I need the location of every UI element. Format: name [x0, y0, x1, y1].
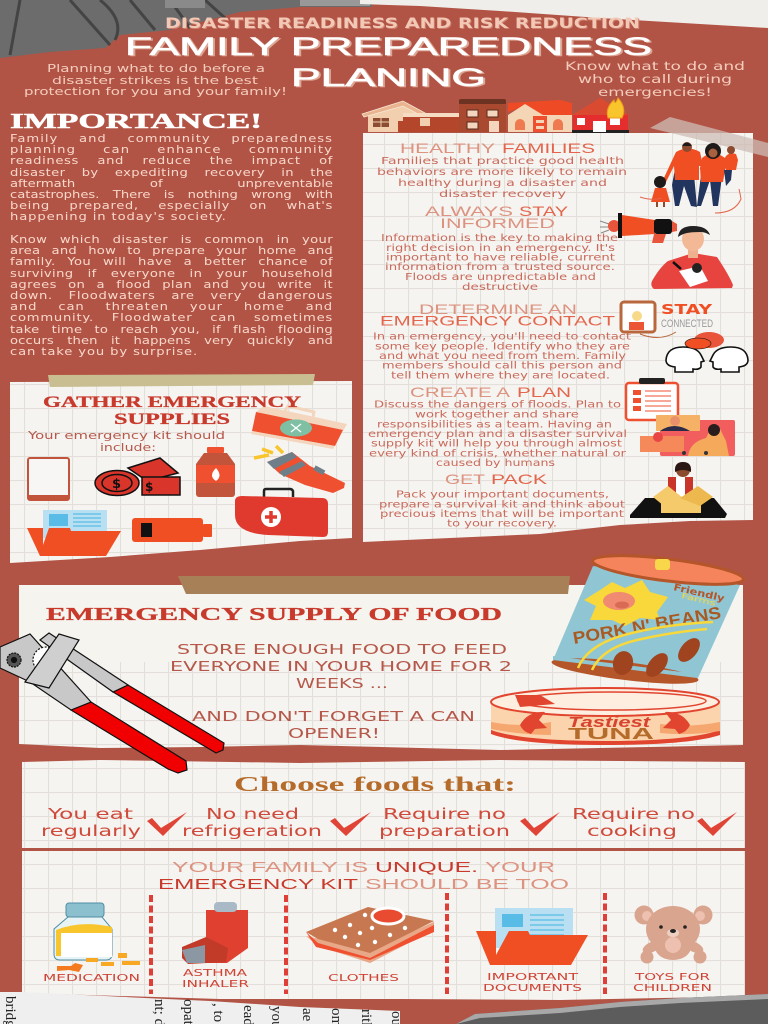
icon: money [95, 458, 180, 496]
tape on food panel [178, 576, 570, 594]
item: medication: MEDICATION [43, 973, 140, 984]
importance paragraph one: planning can enhance community [10, 144, 333, 156]
item: no need refrigeration: refrigeration [182, 822, 322, 840]
section: create a plan: work together and share [415, 410, 579, 420]
icon: pork and beans can [550, 550, 745, 689]
importance paragraph two: family. You will have a better chance of [10, 256, 333, 268]
icon: money: $ [145, 480, 153, 494]
icon: money: $ [112, 477, 121, 492]
main title: FAMILY PREPAREDNESS [125, 33, 652, 61]
main title: PLANING [291, 64, 486, 92]
icon: red medical case [235, 489, 328, 537]
section: healthy families: behaviors are more likely to remain [377, 167, 627, 178]
icon: megaphone [600, 213, 677, 243]
item: clothes: CLOTHES [328, 973, 399, 984]
importance paragraph two: can take you by surprise. [10, 346, 198, 358]
item: require no cooking [572, 805, 737, 840]
section: always stay informed [381, 203, 618, 293]
importance paragraph two: surviving if everyone in your household [10, 268, 333, 280]
item: toys for children [633, 906, 712, 994]
supplies heading: SUPPLIES [114, 411, 230, 428]
torn grey photo, bottom right [456, 994, 768, 1024]
intro text left: disaster strikes is the best [52, 75, 258, 87]
supplies heading [43, 394, 302, 428]
section: create a plan: responsibilities as a team. Having an [377, 420, 612, 430]
section: always stay informed: Information is the key to making the [381, 233, 618, 244]
icon: pork and beans can: Farms [681, 591, 717, 608]
food instructions: OPENER! [288, 727, 380, 742]
item: important documents [476, 908, 588, 994]
section: always stay informed: important to have reliable, current [386, 252, 615, 264]
section: emergency contact: EMERGENCY CONTACT [380, 312, 616, 328]
icon: stay connected phone: STAY [661, 303, 713, 318]
section: create a plan: CREATE A [410, 384, 511, 400]
section: emergency contact: tell them where they are located. [391, 370, 610, 382]
intro text right: emergencies! [598, 85, 712, 99]
section: get pack: prepare a survival kit and think about [379, 500, 625, 510]
torn grey photo, top left [0, 0, 372, 58]
section: create a plan: emergency plan and a disaster survival [368, 429, 627, 440]
supplies heading: GATHER EMERGENCY [43, 394, 302, 411]
supplies intro text: Your emergency kit should [27, 429, 225, 442]
section: get pack: GET [445, 471, 486, 487]
section: healthy families [377, 140, 627, 200]
food heading: EMERGENCY SUPPLY OF FOOD [46, 604, 502, 624]
kit heading: YOUR [485, 859, 555, 876]
icon: can opener [0, 633, 224, 773]
item: clothes [306, 907, 434, 984]
importance paragraph one: being prepared, especially on what's [10, 200, 333, 212]
item: important documents: DOCUMENTS [483, 983, 582, 994]
kit heading: UNIQUE. [375, 859, 478, 876]
section: always stay informed: ALWAYS [425, 203, 513, 219]
intro text right [565, 59, 745, 99]
importance paragraph two: agrees on a flood plan and you write it [10, 279, 333, 291]
kit heading [158, 859, 569, 893]
supplies intro text [27, 429, 225, 454]
item: you eat regularly [41, 805, 187, 840]
icon: woman writing [651, 226, 733, 289]
torn newspaper, bottom left [0, 992, 404, 1024]
section: emergency contact: members should call this person and [382, 360, 622, 372]
importance paragraph one: happening in today's society. [10, 211, 227, 223]
item: no need refrigeration: No need [206, 805, 299, 823]
item: medication [43, 903, 140, 984]
item: require no cooking: cooking [587, 822, 677, 840]
section: always stay informed: Floods are unpredictable and [405, 272, 596, 283]
section: get pack: to your recovery. [447, 518, 557, 530]
item: asthma inhaler: ASTHMA [183, 968, 248, 979]
kit heading: SHOULD BE TOO [365, 876, 569, 893]
torn red strip across the foot [0, 993, 768, 1024]
food instructions [170, 643, 512, 742]
intro text right: who to call during [578, 72, 732, 86]
section: healthy families: Families that practice good health [381, 156, 624, 167]
item: require no preparation [379, 805, 560, 840]
item: toys for children: TOYS FOR [633, 972, 711, 983]
importance paragraph two: occurs then it happens very quickly and [10, 335, 333, 347]
section: healthy families: healthy during a disaster and [398, 178, 607, 189]
item: important documents: IMPORTANT [487, 972, 578, 983]
importance paragraph two: take time to reach you, if flash flooding [10, 324, 333, 336]
panel: preparedness advice [363, 117, 768, 542]
section: always stay informed: destructive [462, 282, 538, 293]
icon: family [640, 142, 741, 213]
kit heading: YOUR FAMILY IS [172, 859, 368, 876]
icon: tablet [28, 458, 69, 500]
importance paragraph one: catastrophes. There is nothing wrong with [10, 189, 333, 201]
importance paragraph one: readiness and reduce the impact of [10, 155, 333, 167]
importance paragraph two: community. Floodwater can sometimes [10, 312, 333, 324]
item: require no preparation: preparation [379, 822, 510, 840]
importance paragraph one: Family and community preparedness [10, 133, 333, 145]
section: get pack [379, 471, 625, 530]
importance paragraph one: aftermath of unpreventable [10, 178, 333, 190]
section: get pack: precious items that will be important [380, 509, 624, 520]
item: you eat regularly: You eat [47, 805, 133, 823]
icon: clipboard [626, 378, 678, 420]
section: always stay informed: INFORMED [440, 215, 555, 231]
item: you eat regularly: regularly [41, 822, 141, 840]
importance paragraph two: area and how to prepare your home and [10, 245, 333, 257]
intro text left: protection for you and your family! [24, 86, 287, 98]
intro text left: Planning what to do before a [47, 63, 265, 75]
icon: tuna can: TUNA [568, 726, 655, 743]
item: asthma inhaler: INHALER [182, 979, 250, 990]
section: emergency contact: In an emergency, you'll need to contact [373, 332, 631, 342]
section: get pack: PACK [491, 471, 548, 487]
icon: pork and beans can: Friendly [672, 582, 726, 605]
torn newspaper, bottom left: ae [299, 1008, 315, 1022]
icon: flashlight [254, 446, 345, 493]
torn white paper, top right [360, 0, 768, 28]
icon: row of houses [362, 98, 629, 133]
choose foods heading: Choose foods that: [234, 772, 516, 796]
section: create a plan: PLAN [517, 384, 571, 400]
icon: first aid pouch [251, 406, 347, 449]
food instructions: AND DON'T FORGET A CAN [192, 710, 475, 725]
section: create a plan: Discuss the dangers of floods. Plan to [374, 400, 621, 410]
icon: two heads talking [666, 332, 748, 372]
section: create a plan: every kind of crisis, whether natural or [369, 448, 626, 460]
icon: stay connected phone [621, 302, 713, 338]
section: healthy families: HEALTHY [400, 140, 496, 156]
icon: pork and beans can: PORK N' BEANS [571, 603, 722, 648]
importance paragraph two: Know which disaster is common in your [10, 234, 333, 246]
panel: choose foods [22, 760, 745, 848]
importance paragraph two [10, 234, 333, 358]
icon: stay connected phone: CONNECTED [661, 318, 713, 330]
section: always stay informed: STAY [519, 203, 569, 219]
importance paragraph two: and can threaten your home and [10, 301, 333, 313]
item: require no preparation: Require no [383, 805, 506, 823]
item: toys for children: CHILDREN [633, 983, 712, 994]
importance paragraph one [10, 133, 333, 223]
panel: emergency supply of food [19, 550, 745, 750]
icon: tuna can [491, 688, 720, 745]
item: no need refrigeration [182, 805, 371, 840]
section: emergency contact [373, 301, 631, 382]
section: healthy families: FAMILIES [502, 140, 595, 156]
importance paragraph one: disaster by expediting recovery in the [10, 167, 333, 179]
section: create a plan [368, 384, 627, 469]
item: asthma inhaler [182, 902, 250, 990]
intro text right: Know what to do and [565, 59, 745, 73]
food instructions: EVERYONE IN YOUR HOME FOR 2 [170, 660, 512, 675]
item: require no cooking: Require no [572, 805, 695, 823]
importance heading: IMPORTANCE! [10, 109, 262, 133]
section: always stay informed: right decision in an emergency. It's [386, 243, 615, 254]
section: create a plan: caused by humans [436, 458, 555, 469]
torn newspaper, bottom left: , to [210, 1003, 226, 1022]
section: emergency contact: and what you need from them. Family [379, 351, 626, 362]
intro text left [24, 63, 287, 98]
kit heading: EMERGENCY KIT [158, 876, 358, 893]
icon: tuna can: Tastiest [568, 714, 651, 731]
icon: people on video call [640, 415, 735, 456]
icon: woman packing box [630, 462, 727, 518]
section: healthy families: disaster recovery [439, 189, 567, 200]
panel: family emergency kit [22, 851, 745, 1001]
supplies intro text: include: [100, 441, 156, 454]
tape on supplies panel [48, 374, 315, 387]
section: create a plan: supply kit will help you through almost [371, 438, 622, 450]
icon: water bottle [196, 447, 235, 497]
food instructions: STORE ENOUGH FOOD TO FEED [177, 643, 507, 658]
section: get pack: Pack your important documents, [396, 490, 609, 500]
icon: folder [27, 510, 121, 556]
food instructions: WEEKS ... [296, 677, 388, 692]
icon: battery [132, 518, 212, 542]
section: emergency contact: DETERMINE AN [419, 301, 577, 317]
importance paragraph two: down. Floodwaters are very dangerous [10, 290, 333, 302]
supertitle: DISASTER READINESS AND RISK REDUCTION [165, 16, 640, 32]
section: emergency contact: some key people. Identify who they are [375, 342, 630, 352]
main title [125, 33, 652, 92]
section: always stay informed: information from a trusted source. [385, 262, 615, 273]
panel: gather emergency supplies [10, 374, 352, 563]
tape on advice panel [650, 117, 768, 157]
